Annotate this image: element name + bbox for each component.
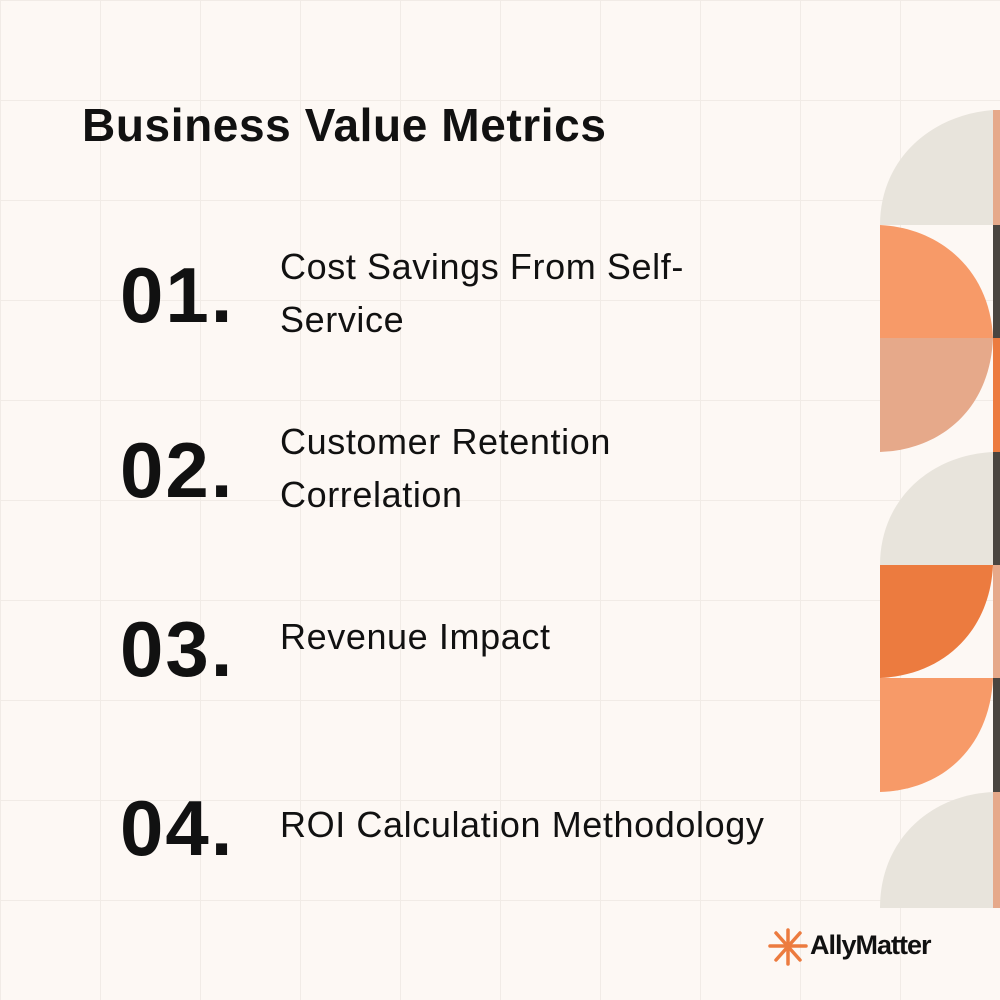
logo: AllyMatter — [810, 930, 931, 960]
item 03: Revenue Impact — [280, 616, 551, 657]
icon: logo star — [768, 928, 808, 966]
title: Business Value Metrics — [82, 99, 607, 151]
item 03: 03. — [120, 605, 234, 693]
item 02: Correlation — [280, 474, 463, 515]
logo — [768, 928, 932, 966]
item 01: Cost Savings From Self- — [280, 246, 684, 287]
item 01: Service — [280, 299, 404, 340]
item 03 — [120, 605, 551, 693]
item 02 — [120, 421, 611, 515]
item 02: Customer Retention — [280, 421, 611, 462]
item 01: 01. — [120, 251, 234, 339]
item 04: 04. — [120, 784, 234, 872]
item 04 — [120, 784, 764, 872]
item 02: 02. — [120, 426, 234, 514]
item 04: ROI Calculation Methodology — [280, 804, 764, 845]
item 01 — [120, 246, 684, 340]
